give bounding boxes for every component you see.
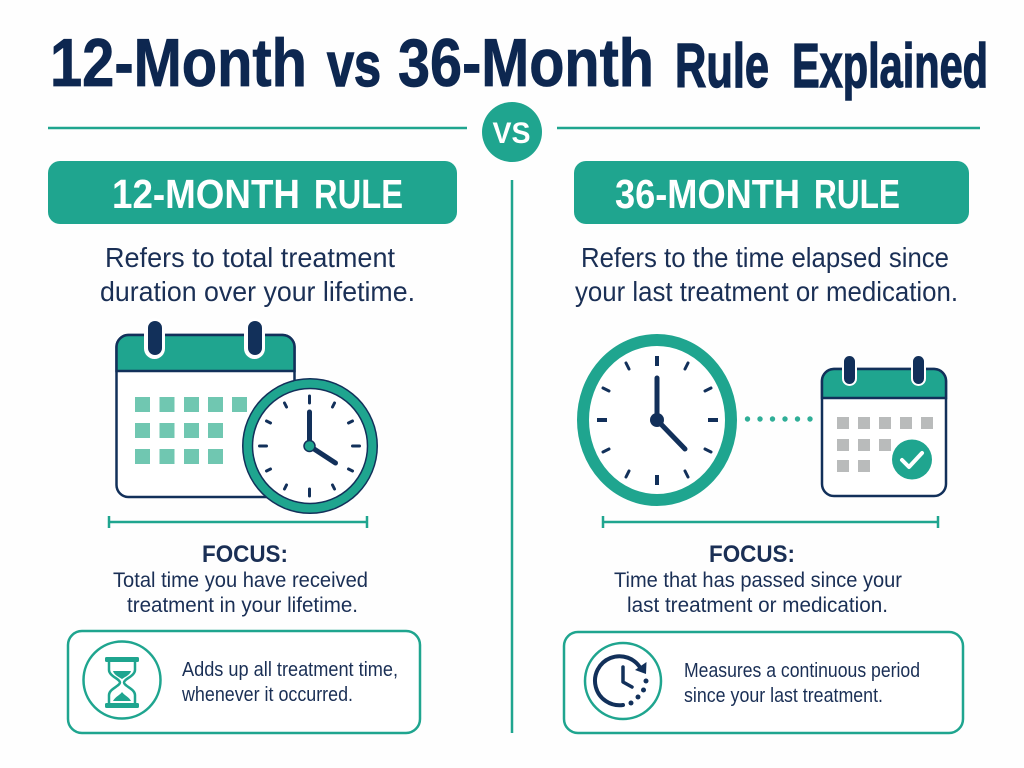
heading: 36-month rule: 36-MONTH [615,171,800,217]
text: 36-month definition [575,242,958,307]
callout: adds up treatment time: Adds up all treatment time, [182,659,398,681]
heading: 36-month rule: RULE [814,171,900,217]
icon: clock [583,340,731,500]
heading: 36-month rule [574,161,969,224]
vs badge: VS [492,117,530,150]
timeline bracket: 12-month [109,516,367,528]
title: Rule [675,32,769,101]
icon: calendar with clock [116,318,378,514]
text: 36-month focus: FOCUS: [709,541,795,568]
heading: 12-month rule: 12-MONTH [112,171,300,217]
text: 36-month focus: last treatment or medication. [627,594,888,617]
icon: hourglass [84,642,160,718]
heading: 12-month rule [48,161,457,224]
dotted connector [745,416,813,422]
vs badge [482,102,542,162]
title: 36-Month [398,25,654,101]
text: 36-month definition: Refers to the time elapsed since [581,242,949,273]
icon: calendar with check [822,354,946,496]
text: 12-month definition: duration over your lifetime. [100,276,415,307]
callout: continuous period: Measures a continuous period [684,660,920,682]
title: 12-Month [50,25,307,101]
heading: 12-month rule: RULE [314,171,403,217]
text: 12-month definition [100,242,415,307]
title: vs [327,31,381,100]
panel: 36-month rule [564,161,969,733]
text: 12-month focus: treatment in your lifetime. [127,594,358,617]
text: 36-month focus [614,541,902,617]
text: 36-month focus: Time that has passed since your [614,569,902,592]
text: 12-month focus: Total time you have received [113,569,368,592]
callout: continuous period [564,632,963,733]
text: 36-month definition: your last treatment or medication. [575,276,958,307]
callout: continuous period: since your last treatment. [684,685,883,707]
callout: adds up treatment time [68,631,420,733]
panel: 12-month rule [48,161,457,733]
text: 12-month focus [113,541,368,617]
callout: adds up treatment time: whenever it occurred. [181,684,353,706]
title [50,25,988,101]
timeline bracket: 36-month [603,516,938,528]
text: 12-month definition: Refers to total treatment [105,242,395,273]
icon: clock with arrow [585,643,661,719]
text: 12-month focus: FOCUS: [202,541,288,568]
